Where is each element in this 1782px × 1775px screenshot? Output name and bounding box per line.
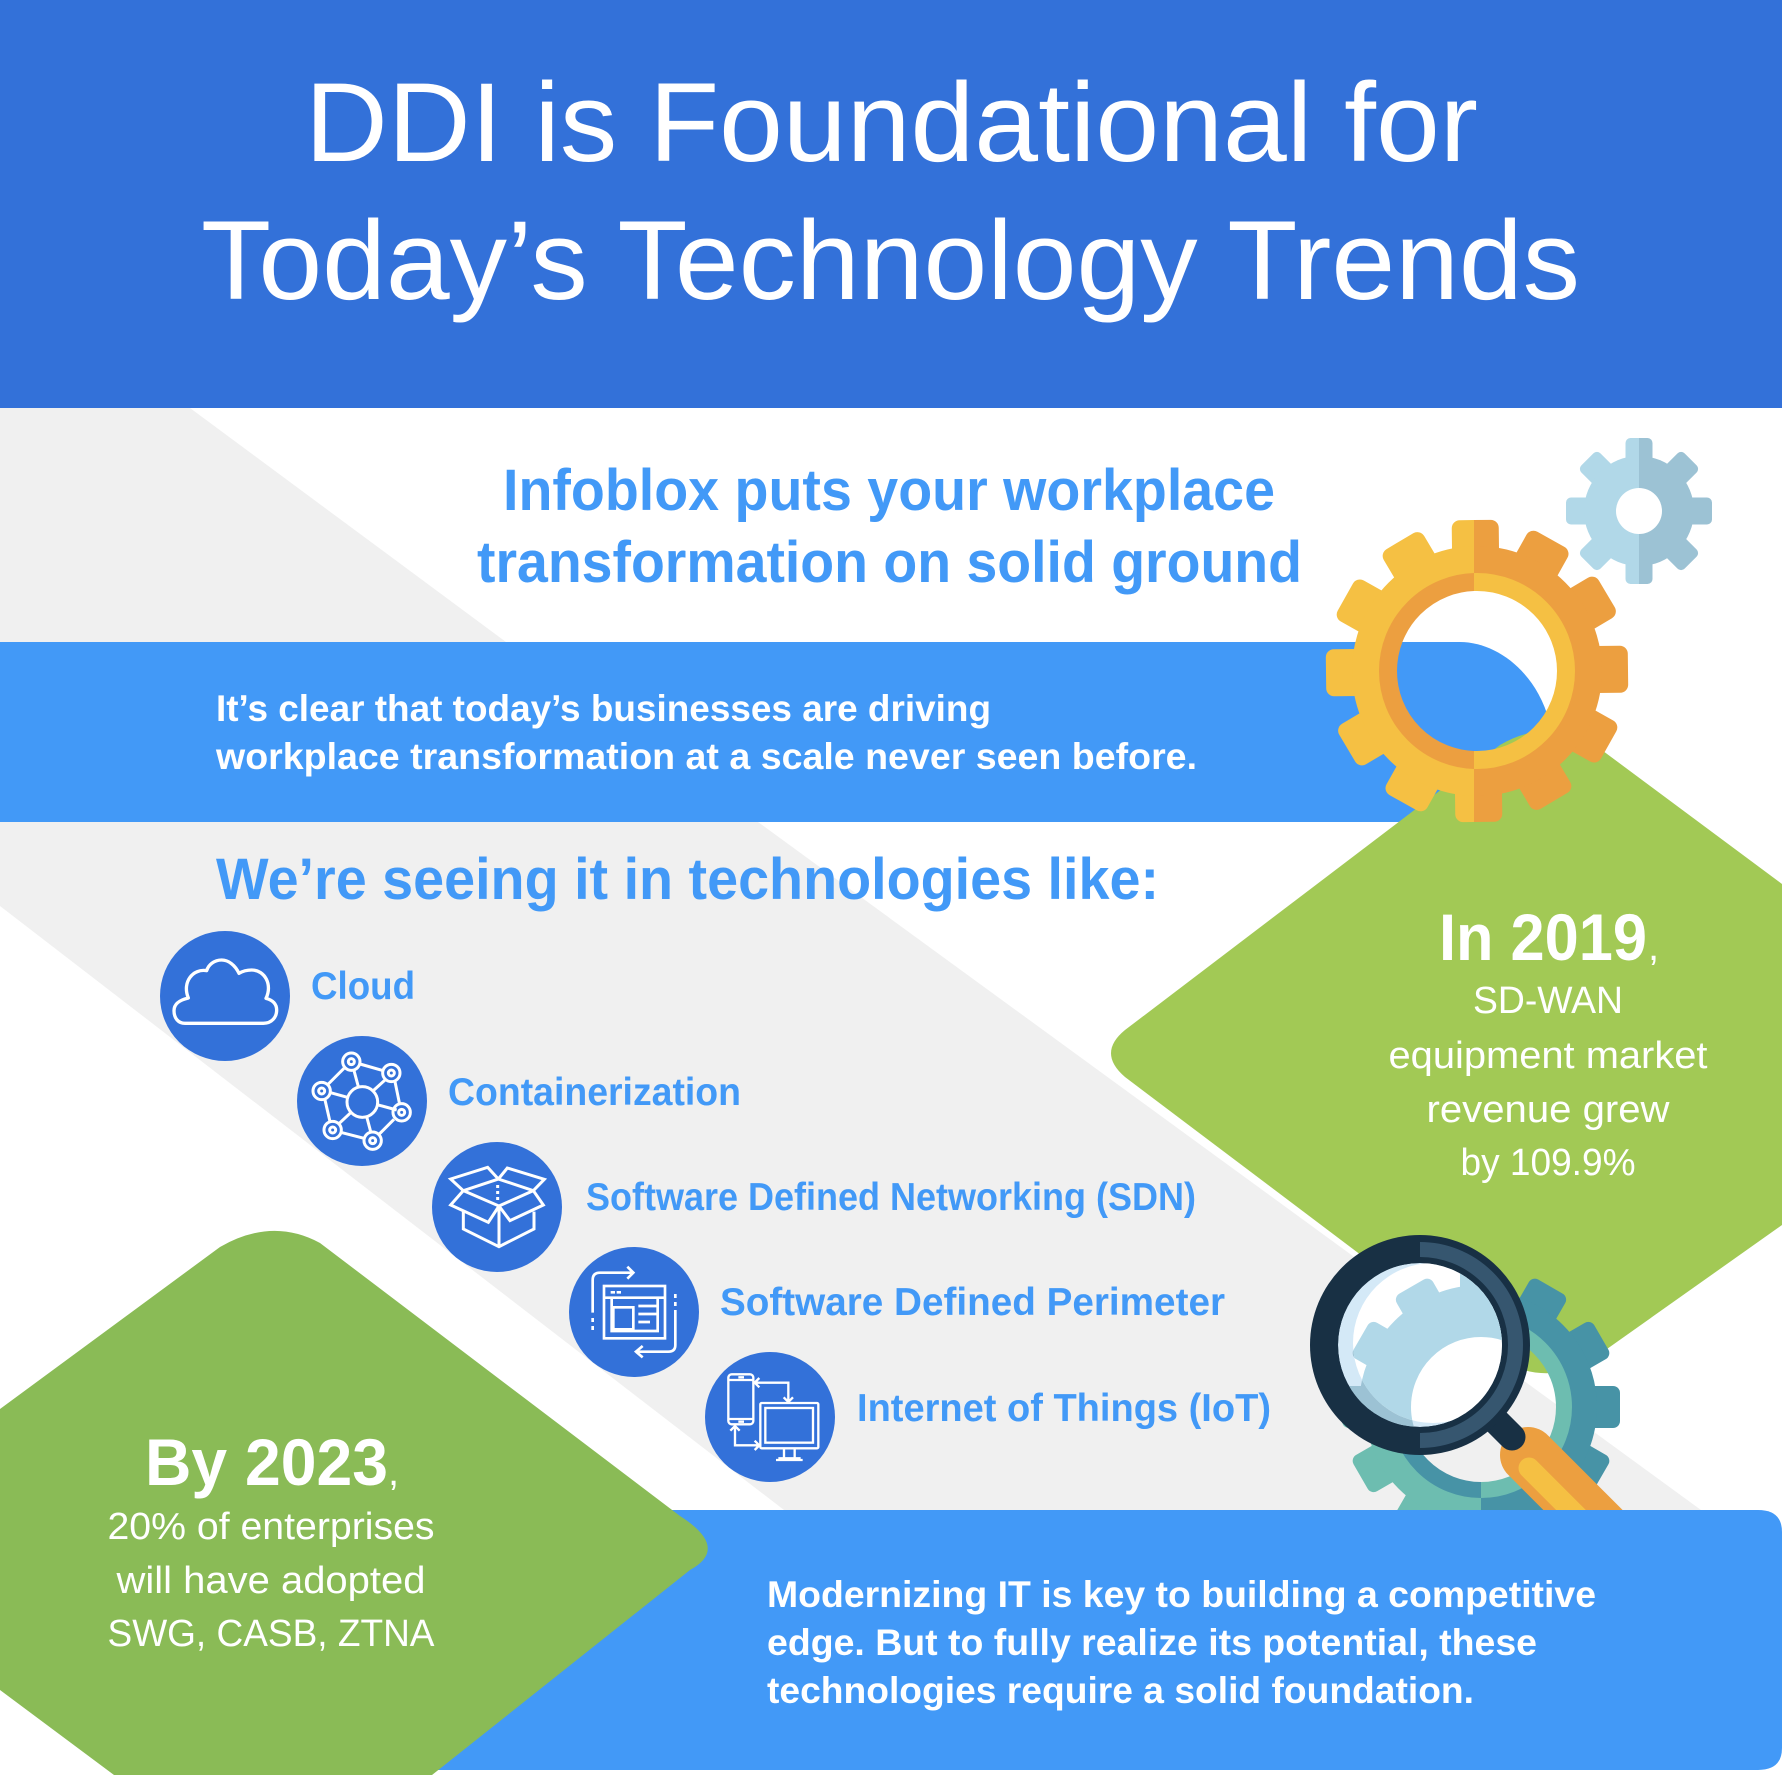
stat text: 2019: SD-WAN (1473, 980, 1623, 1022)
green diamond: 2019 stat (1111, 731, 1782, 1373)
conclusion text (767, 1574, 1596, 1711)
green diamond: 2023 stat (0, 1231, 708, 1775)
stat text: 2019: by 109.9% (1460, 1142, 1636, 1184)
header band (0, 0, 1782, 408)
icon: browser with arrows (569, 1247, 699, 1377)
stat text: 2019 (1388, 900, 1708, 1184)
stat text: 2023: , (388, 1450, 399, 1494)
conclusion text: edge. But to fully realize its potential, these (767, 1622, 1537, 1663)
stat text: 2019: revenue grew (1426, 1089, 1670, 1131)
blue band: intro (0, 642, 1549, 822)
technology list (160, 931, 1271, 1482)
blue band: conclusion (420, 1510, 1782, 1770)
label: software defined networking: Software Defined Networking (SDN) (586, 1176, 1196, 1219)
label: containerization: Containerization (448, 1071, 741, 1114)
label: software defined perimeter: Software Defined Perimeter (720, 1281, 1225, 1324)
icon: teal gear (1342, 1278, 1620, 1510)
stat text: 2019: In 2019 (1439, 900, 1647, 974)
stat text: 2023 (108, 1425, 435, 1655)
title: DDI is Foundational for (305, 60, 1478, 185)
icon: cloud (160, 931, 290, 1061)
icon: open box (432, 1142, 562, 1272)
stat text: 2023: SWG, CASB, ZTNA (108, 1613, 435, 1655)
conclusion text: technologies require a solid foundation. (767, 1670, 1474, 1711)
subheading: Infoblox puts your workplace (503, 458, 1275, 523)
intro text: It’s clear that today’s businesses are driving (216, 688, 991, 729)
stat text: 2019: equipment market (1388, 1035, 1708, 1077)
background diagonal band: middle (0, 822, 1701, 1510)
icon: small blue gear (1566, 438, 1712, 584)
icon: containerization network (297, 1036, 427, 1166)
subheading (477, 458, 1302, 595)
title (201, 60, 1580, 323)
icon: magnifying glass (1310, 1235, 1622, 1510)
intro text: workplace transformation at a scale never seen before. (215, 736, 1197, 777)
stat text: 2019: , (1648, 925, 1659, 969)
heading: technologies: We’re seeing it in technologies like: (216, 847, 1159, 912)
background diagonal band: top (0, 408, 506, 642)
stat text: 2023: will have adopted (115, 1560, 425, 1602)
conclusion text: Modernizing IT is key to building a competitive (767, 1574, 1596, 1615)
subheading: transformation on solid ground (477, 530, 1302, 595)
stat text: 2023: 20% of enterprises (108, 1506, 434, 1548)
intro text (215, 688, 1197, 777)
icon: devices (705, 1352, 835, 1482)
label: cloud: Cloud (311, 965, 415, 1008)
title: Today’s Technology Trends (201, 198, 1580, 323)
label: internet of things: Internet of Things (IoT) (857, 1387, 1271, 1430)
icon: large orange gear (1324, 518, 1630, 824)
stat text: 2023: By 2023 (145, 1425, 388, 1499)
